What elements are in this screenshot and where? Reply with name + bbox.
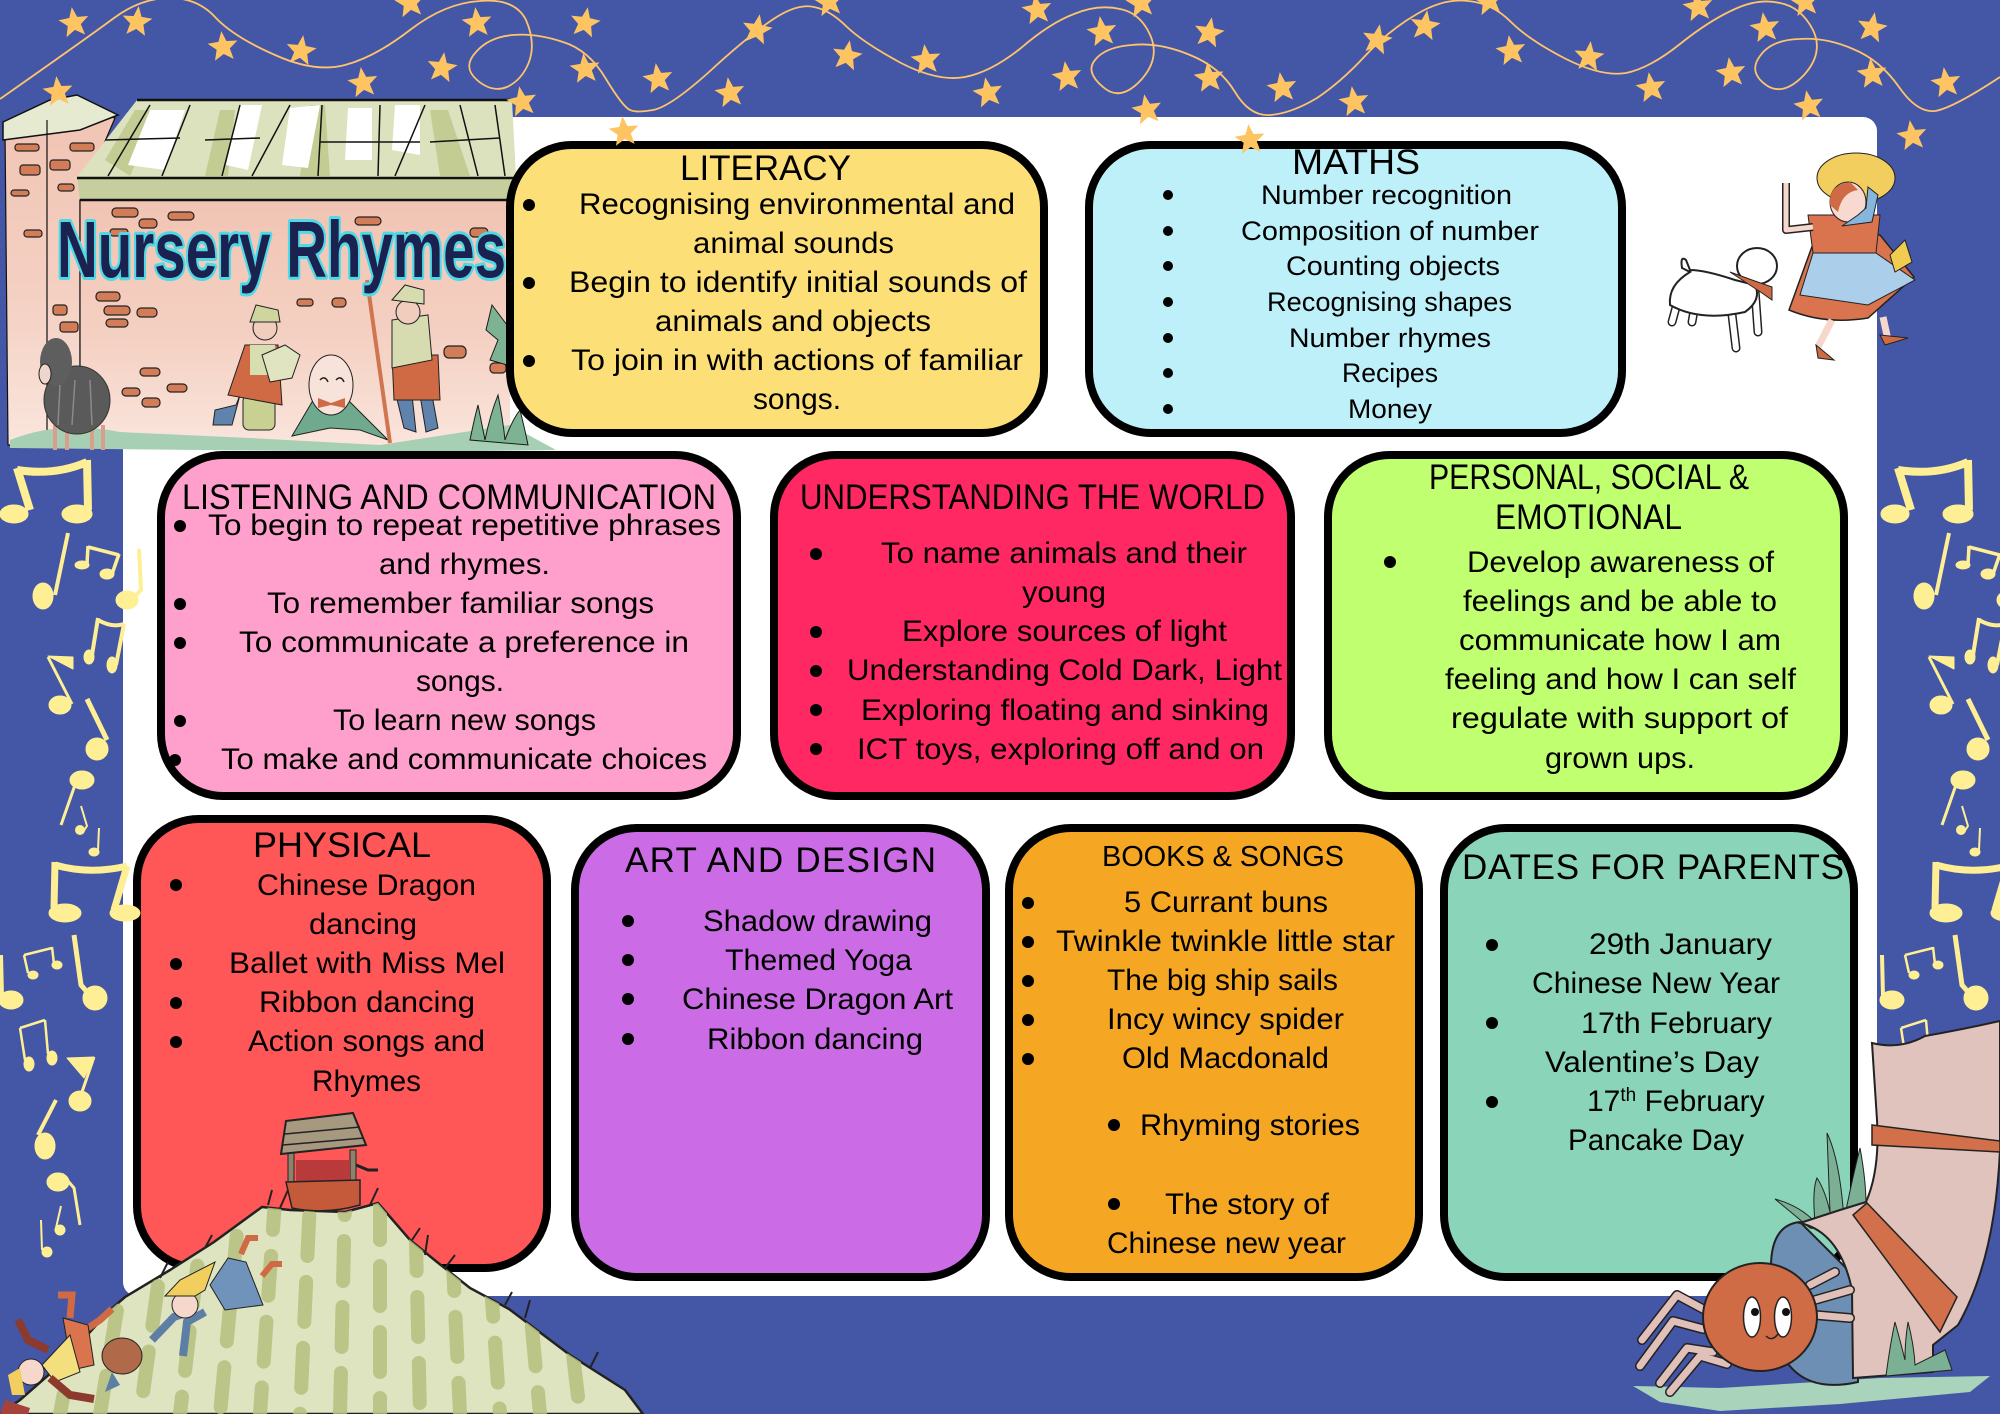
title: Nursery Rhymes: Nursery Rhymes <box>57 205 506 294</box>
spider body <box>1703 1263 1817 1371</box>
literacy box <box>510 145 1044 433</box>
physical list <box>170 869 505 1098</box>
personal list: grown ups. <box>1545 742 1695 775</box>
pipe opening <box>1771 1222 1858 1385</box>
spider legs <box>1640 1272 1850 1392</box>
understanding box <box>774 455 1291 796</box>
Jill <box>152 1238 282 1356</box>
personal heading: EMOTIONAL <box>1495 498 1682 537</box>
bucket <box>102 1338 142 1392</box>
listening list: To make and communicate choices <box>221 743 707 776</box>
personal list: communicate how I am <box>1459 624 1781 657</box>
dates list: th <box>1620 1085 1636 1106</box>
books list: Twinkle twinkle little star <box>1056 925 1395 958</box>
wall <box>80 198 510 446</box>
understanding list: Exploring floating and sinking <box>861 694 1269 727</box>
black sheep <box>39 338 110 450</box>
maths box <box>1089 145 1622 433</box>
personal heading: PERSONAL, SOCIAL & <box>1429 458 1749 497</box>
physical list: Chinese Dragon <box>257 869 476 902</box>
decoration: music notes left <box>0 460 141 1257</box>
art box <box>575 828 986 1277</box>
tower <box>5 108 115 445</box>
literacy list <box>523 188 1028 416</box>
understanding list <box>810 537 1283 766</box>
maths heading: MATHS <box>1292 143 1420 182</box>
dates list: 17th February <box>1581 1007 1772 1040</box>
well <box>281 1113 378 1211</box>
understanding list: ICT toys, exploring off and on <box>857 733 1264 766</box>
roof <box>77 100 516 177</box>
maths list: Composition of number <box>1241 216 1539 246</box>
dates list <box>1486 928 1780 1157</box>
ground grass <box>10 425 556 452</box>
panel: art and design <box>575 828 986 1277</box>
understanding list: young <box>1022 576 1106 609</box>
personal list: feeling and how I can self <box>1445 663 1797 696</box>
understanding list: Explore sources of light <box>902 615 1228 648</box>
books heading: BOOKS & SONGS <box>1102 841 1344 873</box>
listening list: songs. <box>416 665 504 698</box>
listening list: To learn new songs <box>333 704 596 737</box>
panel: maths <box>1089 143 1622 433</box>
dates heading: DATES FOR PARENTS <box>1462 848 1844 887</box>
physical list: Ballet with Miss Mel <box>229 947 505 980</box>
art list: Ribbon dancing <box>707 1023 923 1056</box>
literacy list: animals and objects <box>655 305 931 338</box>
dates list: 29th January <box>1589 928 1772 961</box>
Jack <box>0 1295 112 1414</box>
literacy list: Recognising environmental and <box>579 188 1015 221</box>
kneeling guard <box>213 305 300 430</box>
physical list: dancing <box>309 908 417 941</box>
physical list: Rhymes <box>312 1065 421 1098</box>
listening box <box>161 455 737 796</box>
decoration: star garland <box>0 0 2000 154</box>
maths list <box>1163 180 1539 424</box>
illustration: Incy Wincy spider and spout <box>1633 1021 2000 1411</box>
maths list: Number recognition <box>1261 180 1512 210</box>
books list: The big ship sails <box>1107 964 1338 997</box>
listening list: To communicate a preference in <box>239 626 689 659</box>
maths list: Counting objects <box>1286 251 1500 281</box>
literacy list: animal sounds <box>693 227 894 260</box>
listening heading: LISTENING AND COMMUNICATION <box>182 478 716 517</box>
listening list <box>169 509 721 776</box>
maths list: Number rhymes <box>1289 323 1491 353</box>
dates box <box>1444 828 1854 1277</box>
maths list: Recognising shapes <box>1267 287 1512 317</box>
bricks <box>11 143 506 407</box>
art list: Chinese Dragon Art <box>682 983 954 1016</box>
art list <box>622 905 954 1056</box>
lamb <box>1670 248 1777 348</box>
Mary <box>1786 153 1915 360</box>
panel: books and songs <box>1009 828 1419 1277</box>
personal heading <box>1429 458 1749 537</box>
art list: Shadow drawing <box>703 905 932 938</box>
ground <box>1633 1376 1990 1411</box>
bush <box>486 305 507 365</box>
understanding heading: UNDERSTANDING THE WORLD <box>800 478 1265 517</box>
physical list: Action songs and <box>248 1025 485 1058</box>
books list <box>1022 886 1395 1260</box>
books list: Old Macdonald <box>1122 1042 1329 1075</box>
panel: literacy <box>510 145 1044 433</box>
panel: personal, social and emotional <box>1328 455 1844 796</box>
panel: listening and communication <box>161 455 737 796</box>
grass behind spout <box>1775 1133 1866 1232</box>
panel: understanding the world <box>774 455 1291 796</box>
literacy list: songs. <box>753 383 841 416</box>
personal list: Develop awareness of <box>1467 546 1775 579</box>
art list: Themed Yoga <box>725 944 912 977</box>
books list: Incy wincy spider <box>1107 1003 1344 1036</box>
books list: The story of <box>1165 1188 1330 1221</box>
physical list: Ribbon dancing <box>259 986 475 1019</box>
personal list: feelings and be able to <box>1463 585 1777 618</box>
maths list: Recipes <box>1342 358 1438 388</box>
illustration: Humpty Dumpty wall scene <box>3 95 556 452</box>
books list: 5 Currant buns <box>1124 886 1328 919</box>
physical box <box>137 819 547 1268</box>
panel: physical <box>137 819 547 1268</box>
Humpty Dumpty <box>292 355 388 440</box>
personal box <box>1328 455 1844 796</box>
art heading: ART AND DESIGN <box>625 841 936 880</box>
illustration: Mary and her lamb <box>1670 153 1915 360</box>
dates list: Chinese New Year <box>1532 967 1780 1000</box>
standing guard <box>367 280 440 443</box>
books list: Rhyming stories <box>1140 1109 1360 1142</box>
personal list: regulate with support of <box>1451 702 1789 735</box>
listening list: and rhymes. <box>379 548 550 581</box>
hill <box>0 1188 643 1414</box>
grass tuft at base <box>1886 1322 1952 1376</box>
dates list: February <box>1636 1085 1765 1118</box>
panel: dates for parents <box>1444 828 1854 1277</box>
literacy list: Begin to identify initial sounds of <box>569 266 1028 299</box>
listening list: To begin to repeat repetitive phrases <box>208 509 721 542</box>
spout <box>1800 1021 2000 1378</box>
literacy list: To join in with actions of familiar <box>571 344 1023 377</box>
dates list: Valentine’s Day <box>1545 1046 1759 1079</box>
books list: Chinese new year <box>1107 1227 1346 1260</box>
physical heading: PHYSICAL <box>253 826 431 865</box>
decoration: music notes right <box>1880 460 2000 1257</box>
dates list: 17 <box>1587 1085 1620 1118</box>
understanding list: Understanding Cold Dark, Light <box>847 654 1283 687</box>
literacy heading: LITERACY <box>680 149 851 188</box>
books box <box>1009 828 1419 1277</box>
illustration: Jack and Jill hill <box>0 1113 643 1414</box>
understanding list: To name animals and their <box>881 537 1247 570</box>
dates list: Pancake Day <box>1568 1124 1744 1157</box>
personal list <box>1384 546 1797 775</box>
listening list: To remember familiar songs <box>267 587 654 620</box>
maths list: Money <box>1348 394 1433 424</box>
white content panel <box>123 117 1877 1296</box>
